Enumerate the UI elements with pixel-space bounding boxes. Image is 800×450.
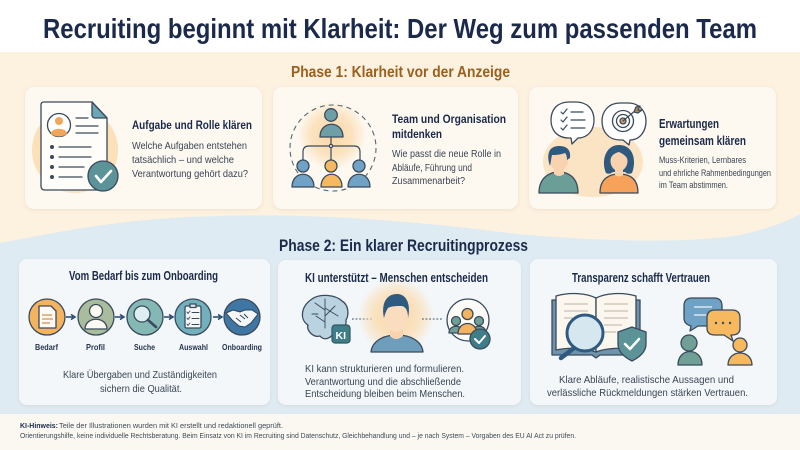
step: Suche [127,299,163,352]
card heading: KI unterstützt – Menschen entscheiden [305,271,488,285]
footer note: Teile der Illustrationen wurden mit KI erstellt und redaktionell geprüft. [59,421,283,430]
icon: person [358,278,434,354]
arrow [66,314,75,320]
card text: im Team abstimmen. [659,180,728,190]
icon: org chart team [290,101,376,191]
arrow [164,314,173,320]
arrow [115,314,124,320]
icon: AI brain: KI [336,330,346,342]
card background [278,260,521,405]
panel: Team und Organisation mitdenken [273,87,518,209]
connector: dotted line [352,318,372,320]
card background [530,259,777,405]
step: Profil: Profil [86,342,105,352]
card heading: Transparenz schafft Vertrauen [572,271,710,285]
card text: und ehrliche Rahmenbedingungen [659,168,771,178]
card text: Welche Aufgaben entstehen [132,141,247,152]
icon: team with check [447,299,490,349]
step: Bedarf [29,299,65,352]
step: Bedarf: Bedarf [35,342,58,352]
panel: phase 1 background [0,52,800,243]
panel: Vom Bedarf bis zum Onboarding [19,259,270,405]
card text: Verantwortung und die abschließende [305,376,461,388]
step: Auswahl: Auswahl [179,342,208,352]
card text: Verantwortung gehört dazu? [132,169,248,180]
step: Auswahl [175,299,211,352]
card text: KI kann strukturieren und formulieren. [305,363,464,375]
card text [659,155,771,190]
card text: Zusammenarbeit? [392,176,465,187]
card text: Klare Abläufe, realistische Aussagen und [559,374,734,386]
icon: open book with magnifier and shield [552,294,646,361]
process flow [29,299,262,352]
card background [273,87,518,209]
card text: Klare Übergaben und Zuständigkeiten [63,369,217,381]
connector: dotted line [422,318,442,320]
card background [25,87,262,209]
card background [19,259,270,405]
card heading [392,112,506,141]
card text [305,363,465,400]
icon: two people with speech bubbles [539,102,646,197]
card heading: Aufgabe und Rolle klären [132,118,252,132]
step: Suche: Suche [134,342,155,352]
heading: phase 2: Phase 2: Ein klarer Recruitingprozess [279,236,528,255]
card heading: Erwartungen [659,117,719,131]
card text: Abläufe, Führung und [392,163,472,174]
card background [529,87,776,209]
panel: phase 2 background [0,200,800,415]
card text [63,369,217,395]
card heading: Team und Organisation [392,112,506,126]
card text [132,141,248,180]
card heading: Vom Bedarf bis zum Onboarding [69,269,218,283]
footer note [20,421,576,440]
card heading [659,117,746,148]
card text: tatsächlich – und welche [132,155,234,166]
card heading: mitdenken [392,127,442,141]
panel: Aufgabe und Rolle klären [25,87,262,209]
step: Profil [78,299,114,352]
panel: footer background [0,414,800,450]
card text [547,374,748,399]
panel: KI unterstützt – Menschen entscheiden [278,260,521,405]
arrow [213,314,222,320]
card text [392,149,501,187]
card text: sichern die Qualität. [100,383,182,395]
icon: two people in dialogue [678,298,752,365]
card text: Wie passt die neue Rolle in [392,149,501,160]
panel: Erwartungen gemeinsam klären [529,87,776,209]
heading: phase 1: Phase 1: Klarheit vor der Anzeige [291,64,510,81]
card text: Muss-Kriterien, Lernbares [659,155,746,165]
panel: Transparenz schafft Vertrauen [530,259,777,405]
footer note: KI-Hinweis: [20,421,58,430]
icon: AI brain [302,295,350,343]
icon: profile document with check [32,102,118,193]
card heading: gemeinsam klären [659,134,746,148]
card text: Entscheidung bleiben beim Menschen. [305,388,465,400]
card text: verlässliche Rückmeldungen stärken Vertrauen. [547,387,748,399]
footer note: Orientierungshilfe, keine individuelle Rechtsberatung. Beim Einsatz von KI im Recruiting sind Datenschutz, Gleichbehandlung und – je nach System – Vorgaben des EU AI Act zu prüfen. [20,431,576,440]
step: Onboarding: Onboarding [222,342,262,352]
step: Onboarding [222,299,262,352]
